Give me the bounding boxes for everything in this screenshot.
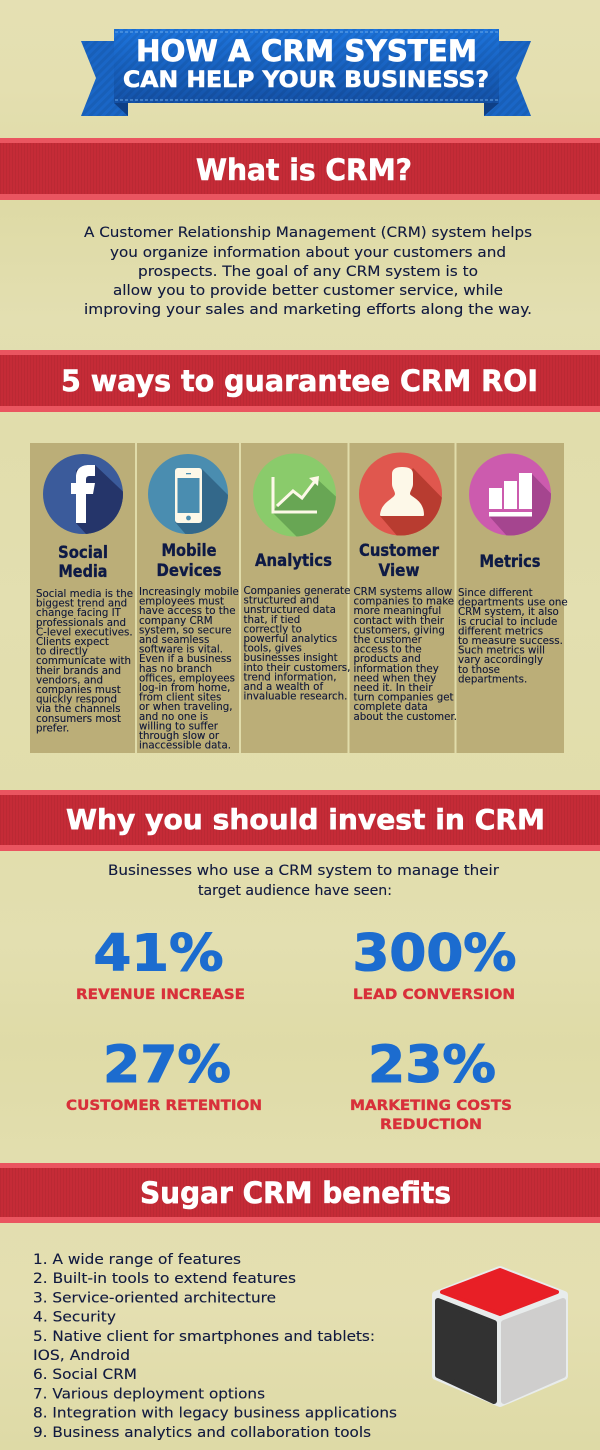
stat: revenue increase: 41% xyxy=(94,924,224,984)
body text: that, if tied xyxy=(244,614,300,626)
stat: revenue increase: REVENUE INCREASE xyxy=(76,986,245,1003)
stat: revenue increase xyxy=(76,924,245,1003)
column: Social Media: Media xyxy=(58,562,108,581)
benefits list: 6. Social CRM xyxy=(33,1366,137,1383)
benefits list: 3. Service-oriented architecture xyxy=(33,1289,276,1306)
stat: marketing costs reduction: REDUCTION xyxy=(380,1116,482,1133)
title ribbon xyxy=(81,29,531,116)
benefits list: IOS, Android xyxy=(33,1347,130,1364)
stat: customer retention: 27% xyxy=(103,1036,231,1095)
body text: to measure success. xyxy=(458,635,563,647)
icon: line chart xyxy=(253,454,336,536)
body text: Even if a business xyxy=(139,653,232,665)
body text: via the channels xyxy=(36,703,120,715)
body text: different metrics xyxy=(458,625,543,637)
body text: inaccessible data. xyxy=(139,740,231,752)
icon: SugarCRM cube xyxy=(436,1270,564,1403)
body text: to directly xyxy=(36,646,88,658)
body text: system, so secure xyxy=(139,624,232,636)
section band: What is CRM?: What is CRM? xyxy=(196,153,412,187)
benefits list xyxy=(33,1251,397,1441)
intro paragraph: allow you to provide better customer service, while xyxy=(113,282,503,299)
benefits list: 1. A wide range of features xyxy=(33,1251,241,1268)
section band: Why you should invest in CRM xyxy=(0,790,600,851)
stat: customer retention xyxy=(66,1036,262,1114)
icon: person xyxy=(359,452,442,536)
icon: bar chart xyxy=(469,454,551,536)
body text: vendors, and xyxy=(36,674,103,686)
stat: customer retention: CUSTOMER RETENTION xyxy=(66,1097,262,1114)
body text: professionals and xyxy=(36,617,126,629)
body text: quickly respond xyxy=(36,694,117,706)
section band: 5 ways to guarantee CRM ROI xyxy=(0,350,600,412)
intro paragraph: improving your sales and marketing efforts along the way. xyxy=(84,301,532,318)
column: Analytics xyxy=(244,454,350,703)
benefits list: 5. Native client for smartphones and tablets: xyxy=(33,1328,375,1345)
body text: into their customers, xyxy=(244,662,350,674)
body text: vary accordingly xyxy=(458,654,543,666)
body text: Since different xyxy=(458,587,533,599)
section band: Sugar CRM benefits: Sugar CRM benefits xyxy=(140,1176,451,1210)
stat: lead conversion: LEAD CONVERSION xyxy=(353,986,515,1003)
body text: invaluable research. xyxy=(244,691,347,703)
intro paragraph xyxy=(84,224,532,318)
body text: their brands and xyxy=(36,665,121,677)
body text: has no branch xyxy=(139,663,212,675)
body text: Social media is the xyxy=(36,588,133,600)
body text: log-in from home, xyxy=(139,682,230,694)
body text: about the customer. xyxy=(354,711,457,723)
body text: trend information, xyxy=(244,671,336,683)
body text: consumers most xyxy=(36,713,121,725)
body text: structured and xyxy=(244,595,319,607)
column: Mobile Devices xyxy=(139,454,240,752)
body text: communicate with xyxy=(36,655,131,667)
body text: through slow or xyxy=(139,730,220,742)
body text: from client sites xyxy=(139,692,221,704)
body text: Clients expect xyxy=(36,636,109,648)
body text: businesses insight xyxy=(244,652,338,664)
column: Metrics xyxy=(458,454,568,685)
column: Customer View: View xyxy=(378,561,420,580)
benefits list: 8. Integration with legacy business applications xyxy=(33,1405,397,1422)
body text: the customer xyxy=(354,634,423,646)
stat: marketing costs reduction: 23% xyxy=(368,1036,496,1095)
title text: CAN HELP YOUR BUSINESS? xyxy=(123,68,489,93)
intro paragraph: prospects. The goal of any CRM system is to xyxy=(138,263,478,280)
body text: or when traveling, xyxy=(139,701,233,713)
ribbon right tail xyxy=(484,41,531,116)
panel: five ways table xyxy=(30,443,568,753)
section band: Why you should invest in CRM: Why you should invest in CRM xyxy=(66,803,545,836)
ribbon left tail xyxy=(81,41,128,116)
intro to statistics xyxy=(108,862,499,899)
intro to statistics: target audience have seen: xyxy=(198,882,392,899)
body text: Increasingly mobile xyxy=(139,586,239,598)
body text: employees must xyxy=(139,596,224,608)
section band: 5 ways to guarantee CRM ROI: 5 ways to guarantee CRM ROI xyxy=(61,364,538,398)
body text: Such metrics will xyxy=(458,645,545,657)
column: Mobile Devices: Mobile xyxy=(162,541,216,560)
body text: offices, employees xyxy=(139,672,235,684)
body text: and no one is xyxy=(139,711,208,723)
body text: companies must xyxy=(36,684,121,696)
body text: powerful analytics xyxy=(244,633,337,645)
body text: company CRM xyxy=(139,615,213,627)
benefits list: 9. Business analytics and collaboration tools xyxy=(33,1424,371,1441)
body text: software is vital. xyxy=(139,644,223,656)
title text: HOW A CRM SYSTEM xyxy=(136,34,477,68)
body text: prefer. xyxy=(36,722,69,734)
benefits list: 7. Various deployment options xyxy=(33,1385,265,1402)
body text: contact with their xyxy=(354,615,445,627)
column: Mobile Devices: Devices xyxy=(156,561,222,580)
body text: need it. In their xyxy=(354,682,433,694)
intro paragraph: A Customer Relationship Management (CRM) system helps xyxy=(84,224,532,241)
body text: to those xyxy=(458,664,500,676)
column: Customer View xyxy=(354,452,457,723)
column: Social Media xyxy=(36,454,135,734)
intro paragraph: you organize information about your customers and xyxy=(110,244,506,261)
column: Analytics: Analytics xyxy=(255,551,332,570)
body text: C-level executives. xyxy=(36,626,133,638)
body text: information they xyxy=(354,663,439,675)
column: Customer View: Customer xyxy=(359,541,440,560)
body text: companies to make xyxy=(354,596,454,608)
body text: CRM systems allow xyxy=(354,586,452,598)
body text: and a wealth of xyxy=(244,681,323,693)
benefits list: 4. Security xyxy=(33,1309,116,1326)
body text: correctly to xyxy=(244,623,302,635)
body text: is crucial to include xyxy=(458,616,557,628)
section band: Sugar CRM benefits xyxy=(0,1163,600,1223)
body text: and seamless xyxy=(139,634,209,646)
body text: departments. xyxy=(458,673,527,685)
body text: turn companies get xyxy=(354,692,454,704)
body text: have access to the xyxy=(139,605,236,617)
icon: facebook xyxy=(43,454,123,534)
stat: lead conversion: 300% xyxy=(352,924,516,984)
ribbon centre xyxy=(114,29,499,103)
body text: more meaningful xyxy=(354,605,441,617)
body text: willing to suffer xyxy=(139,720,219,732)
body text: access to the xyxy=(354,644,422,656)
body text: customers, giving xyxy=(354,624,445,636)
body text: CRM system, it also xyxy=(458,606,559,618)
intro to statistics: Businesses who use a CRM system to manage their xyxy=(108,862,499,879)
section band: What is CRM? xyxy=(0,138,600,200)
benefits list: 2. Built-in tools to extend features xyxy=(33,1270,296,1287)
body text: products and xyxy=(354,653,421,665)
body text: need when they xyxy=(354,672,436,684)
body text: Companies generate xyxy=(244,585,350,597)
column: Metrics: Metrics xyxy=(480,552,541,571)
body text: complete data xyxy=(354,701,428,713)
stat: marketing costs reduction: MARKETING COSTS xyxy=(350,1097,512,1114)
column: Social Media: Social xyxy=(58,543,108,562)
body text: biggest trend and xyxy=(36,598,127,610)
body text: tools, gives xyxy=(244,643,302,655)
body text: departments use one xyxy=(458,597,568,609)
body text: change facing IT xyxy=(36,607,122,619)
title text xyxy=(123,34,489,93)
body text: unstructured data xyxy=(244,604,336,616)
icon: smartphone xyxy=(148,454,228,534)
stat: marketing costs reduction xyxy=(350,1036,512,1133)
